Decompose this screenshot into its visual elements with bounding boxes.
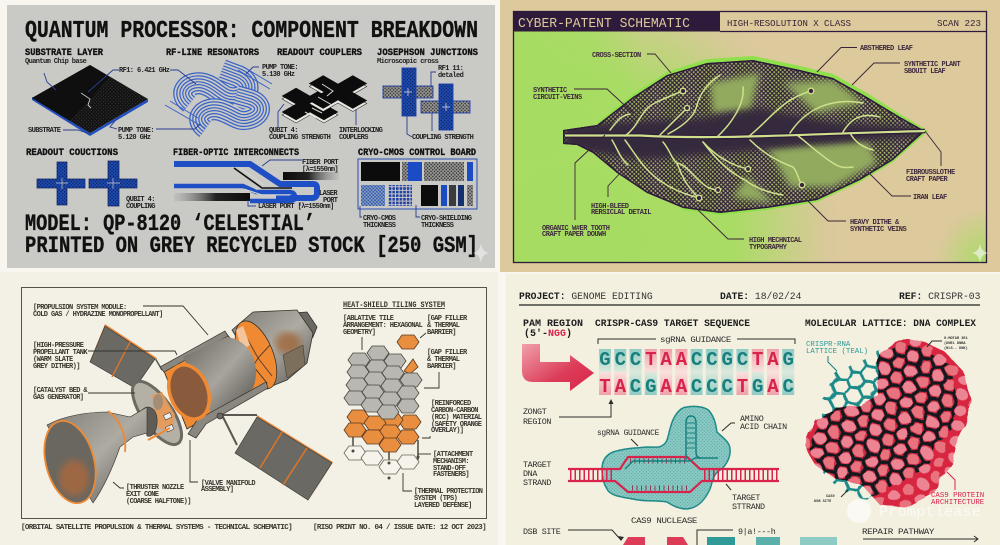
icon: sparkle	[473, 243, 489, 263]
callout: propellant tank: PROPELLANT TANK	[33, 349, 88, 357]
callout: propellant tank: GREY DITHER)]	[33, 363, 80, 371]
section: readout couplers: QUBIT 4:	[269, 127, 298, 135]
label: motar note: G:MOTAR 3E1	[944, 337, 968, 341]
section: substrate layer: 5.120 GHz	[118, 134, 151, 142]
callout: high-bleed detail: RERSICLAL DETAIL	[591, 209, 651, 217]
section: RF-line resonators: RF-LINE RESONATORS	[166, 47, 259, 59]
callout: gap filler one: BARRIER]	[427, 329, 456, 337]
section: readout couctions: COUPLING	[126, 203, 155, 211]
section: cryo-cmos control board: CRYO-CMOS	[363, 215, 396, 223]
callout: attachment mechanism: FASTENERS]	[433, 471, 469, 479]
panel: CRISPR genome editing	[506, 274, 1000, 545]
section: heat-shield tiling system: HEAT-SHIELD TILING SYSTEM	[343, 301, 445, 310]
label: sgRNA guidance: sgRNA GUIDANCE	[597, 428, 659, 438]
callout: fibrous cloth: CRAFT PAPER	[906, 176, 949, 184]
callout: propulsion module: COLD GAS / HYDRAZINE MONOPROPELLANT]	[33, 311, 163, 319]
section: RF-line resonators: PUMP TONE:	[262, 64, 298, 72]
section: cryo-cmos control board: CRYO-CMOS CONTROL BOARD	[358, 147, 476, 159]
callout: attachment mechanism: MECHANISM:	[433, 458, 469, 466]
section: josephson junctions: detaled	[438, 72, 464, 80]
callout: high mechanical typography	[695, 207, 802, 252]
callout: synthetic circuit-veins: SYNTHETIC	[533, 87, 567, 95]
thruster nozzle	[36, 407, 157, 509]
callout: fibrous cloth	[906, 131, 955, 184]
label: target DNA strand: DNA	[523, 469, 538, 479]
footer: print info: [RISO PRINT NO. 04 / ISSUE DATE: 12 OCT 2023]	[313, 524, 486, 532]
label: target DNA strand: TARGET	[523, 460, 551, 470]
sequence grid	[599, 349, 794, 398]
section: PAM region: (5'-NGG)	[524, 329, 572, 340]
watermark: Promptlease	[879, 504, 981, 521]
valve and ring	[123, 374, 191, 452]
label: target strand: TARGET	[732, 493, 760, 503]
callout: attachment mechanism	[418, 451, 473, 479]
callout: ablative tile: ARRANGEMENT: HEXAGONAL	[343, 322, 423, 330]
section: readout couplers: INTERLOCKING	[339, 127, 383, 135]
header bar: CYBER-PATENT SCHEMATIC	[518, 17, 690, 32]
watermark	[847, 499, 981, 523]
callout: gap filler two: [GAP FILLER	[427, 349, 468, 357]
section: fiber-optic interconnects: FIBER-OPTIC INTERCONNECTS	[173, 147, 299, 159]
sequence grid: T	[645, 349, 657, 371]
section: heat-shield tiling system	[343, 301, 445, 480]
callout: reinforced carbon: [REINFORCED	[431, 400, 471, 408]
label: dsb site small: DSB SITE	[814, 500, 832, 504]
section: fiber-optic interconnects: FIBER PORT	[302, 159, 338, 167]
sequence grid: C	[615, 349, 626, 371]
section: substrate layer: RF1: 6.421 GHz	[119, 67, 170, 75]
sgRNA hairpin	[625, 416, 718, 469]
title: quantum processor: QUANTUM PROCESSOR: COMPONENT BREAKDOWN	[25, 18, 478, 45]
callout: reinforced carbon	[422, 400, 482, 438]
panel: quantum processor	[7, 5, 495, 268]
section: substrate layer: SUBSTRATE LAYER	[25, 47, 104, 59]
callout: catalyst bed: GAS GENERATOR]	[33, 394, 83, 402]
sequence grid: C	[630, 376, 641, 398]
callout: cross-section: CROSS-SECTION	[592, 52, 641, 60]
callout: thermal protection: LAYERED DEFENSE]	[414, 502, 472, 510]
callout: iran leaf: IRAN LEAF	[913, 194, 947, 202]
callout: thermal protection: [THERMAL PROTECTION	[414, 488, 483, 496]
callout: gap filler one: & THERMAL	[427, 322, 460, 330]
callout: reinforced carbon: CARBON-CARBON	[431, 407, 478, 415]
section: fiber-optic interconnects: LASER	[319, 190, 338, 198]
label: target strand: STTRAND	[732, 502, 765, 512]
panel: orbital satellite	[0, 272, 498, 545]
label: target DNA strand: STRAND	[523, 478, 551, 488]
section: josephson junctions: JOSEPHSON JUNCTIONS	[377, 47, 478, 59]
callout: high-bleed detail	[591, 168, 651, 217]
callout: high-bleed detail: HIGH-BLEED	[591, 203, 629, 211]
sequence grid: C	[782, 376, 794, 398]
sequence grid: A	[767, 376, 779, 398]
callout: heavy dither	[807, 200, 907, 234]
callout: synthetic circuit-veins	[533, 87, 633, 113]
callout: propulsion module	[33, 304, 208, 335]
sequence grid: A	[660, 349, 672, 371]
callout: gap filler two: & THERMAL	[427, 356, 460, 364]
sgRNA bracket: sgRNA GUIDANCE	[660, 335, 731, 345]
section: josephson junctions	[377, 47, 478, 142]
label: sgRNA guidance	[597, 428, 659, 446]
callout: gap filler one: [GAP FILLER	[427, 315, 468, 323]
label: cas9 protein	[931, 472, 985, 507]
callout: high mechanical typography: HIGH MECHNICAL	[749, 237, 802, 245]
section: substrate layer: PUMP TONE:	[118, 127, 154, 135]
sequence grid: C	[691, 376, 702, 398]
callout: propellant tank	[33, 342, 177, 371]
heading: molecular lattice: MOLECULAR LATTICE: DNA COMPLEX	[805, 319, 976, 330]
callout: gap filler two	[424, 349, 468, 388]
sequence grid: G	[721, 349, 733, 371]
callout: cross-section	[592, 52, 671, 73]
sequence grid: A	[615, 376, 627, 398]
section: readout couplers: COUPLING STRENGTH	[269, 134, 331, 142]
callout: organic tooth: CRAFT PAPER DOUWH	[542, 231, 606, 239]
callout: propellant tank: [HIGH-PRESSURE	[33, 342, 84, 350]
label: motar note	[927, 337, 968, 351]
label: motar note: (HLS.- DNK)	[944, 346, 968, 351]
section: fiber-optic interconnects: PORT	[323, 197, 338, 205]
illustration: satellite	[36, 310, 333, 509]
callout: fibrous cloth: FIBROUSSLOTHE	[906, 169, 955, 177]
section: repair pathway: REPAIR PATHWAY	[862, 527, 934, 537]
callout: thruster nozzle: EXIT CONE	[126, 491, 159, 499]
grey hexagon tiles	[344, 346, 422, 419]
target DNA strand	[568, 457, 779, 492]
label: dsb site small	[814, 490, 848, 504]
section: readout couplers: READOUT COUPLERS	[277, 47, 362, 59]
sequence grid: A	[767, 349, 779, 371]
illustration: molecular lattice	[805, 339, 972, 508]
callout: ablative tile	[343, 315, 423, 350]
callout: synthetic plant: SYNTHETIC PLANT	[904, 61, 961, 69]
section: substrate layer: SUBSTRATE	[28, 127, 61, 135]
section: fiber-optic interconnects: LASER PORT [λ=1550nm]	[258, 203, 334, 211]
sequence grid: G	[782, 349, 794, 371]
section: fiber-optic interconnects	[173, 147, 339, 211]
section: RF-line resonators	[156, 47, 298, 129]
section: readout couctions: QUBIT 4:	[126, 196, 155, 204]
header bar: SCAN 223	[937, 18, 981, 29]
section: fiber-optic interconnects: [λ=1550nm]	[302, 166, 338, 174]
sequence grid: T	[752, 349, 763, 371]
callout: synthetic plant: SBOUIT LEAF	[904, 68, 946, 76]
diagram: cas9 nuclease	[568, 406, 779, 509]
callout: iran leaf	[868, 172, 947, 202]
print stock heading: PRINTED ON GREY RECYCLED STOCK [250 GSM]	[25, 233, 478, 259]
illustration: leaf	[560, 55, 930, 220]
label: amino acid chain	[722, 414, 787, 432]
main body cylinder	[160, 331, 268, 438]
section: repair pathway	[862, 527, 978, 542]
model heading: MODEL: QP-8120 ‘CELESTIAL’	[25, 211, 315, 237]
section: cryo-cmos control board: CRYO-SHIELDING	[421, 215, 472, 223]
heading: target sequence: CRISPR-CAS9 TARGET SEQUENCE	[595, 319, 750, 330]
label: crispr-rna lattice: CRISPR-RNA	[806, 341, 851, 349]
sequence grid: A	[676, 376, 688, 398]
label: target strand	[726, 484, 765, 512]
section: readout couplers: COUPLERS	[339, 134, 368, 142]
orange hexagon tiles	[344, 335, 421, 452]
header bar: HIGH-RESOLUTION X CLASS	[727, 18, 851, 29]
label: crispr-rna lattice: LATTICE (TEAL)	[806, 348, 868, 356]
sequence grid: C	[706, 376, 718, 398]
section: PAM region: PAM REGION	[523, 319, 583, 330]
callout: valve manifold: [VALVE MANIFOLD	[201, 480, 255, 488]
sgRNA bracket	[598, 335, 795, 345]
section: readout couplers	[268, 47, 383, 142]
callout: organic tooth	[542, 135, 610, 239]
callout: catalyst bed	[33, 387, 135, 402]
sequence grid: G	[645, 376, 657, 398]
section: readout couctions: READOUT COUCTIONS	[26, 147, 118, 159]
callout: thermal protection	[403, 473, 483, 510]
label: amino acid chain: ACID CHAIN	[740, 422, 787, 432]
white base tiles with fasteners	[344, 432, 420, 480]
section: PAM region	[522, 319, 594, 391]
sequence grid: G	[752, 376, 763, 398]
section: DSB site: DSB SITE	[523, 527, 561, 537]
callout: catalyst bed: [CATALYST BED &	[33, 387, 88, 395]
sequence grid: A	[676, 349, 688, 371]
sequence grid: C	[721, 376, 733, 398]
callout: zongt region: ZONGT	[523, 407, 547, 417]
callout: synthetic circuit-veins: CIRCUIT-VEINS	[533, 94, 582, 102]
callout: propellant tank: (WARM SLATE	[33, 356, 73, 364]
section: josephson junctions: COUPLING STRENGTH	[412, 134, 474, 142]
label: cas9 protein: ARCHITECTURE	[931, 499, 985, 507]
callout: reinforced carbon: (SAFETY ORANGE	[431, 421, 482, 429]
callout: high mechanical typography: TYPOGRAPHY	[749, 244, 788, 252]
section: josephson junctions: Microscopic cross	[377, 58, 439, 66]
sequence grid: G	[599, 349, 611, 371]
section: substrate layer: Quantum Chip base	[25, 58, 87, 66]
rear module	[227, 310, 317, 395]
section: RF-line resonators: 5.130 GHz	[262, 71, 295, 79]
header bar	[514, 12, 986, 32]
section: DSB site: 9|a!---h	[738, 527, 776, 537]
icon: sparkle	[972, 243, 988, 263]
callout: thermal protection: SYSTEM (TPS)	[414, 495, 458, 503]
callout: synthetic plant	[852, 61, 961, 85]
section: DSB site	[523, 527, 837, 545]
section: cryo-cmos control board: THICKNESS	[363, 222, 396, 230]
header row: REF: CRISPR-03	[899, 291, 981, 302]
label: motar note: (DNEL DNBA	[944, 341, 966, 346]
callout: heavy dither: SYNTHETIC VEINS	[850, 226, 907, 234]
leaf veins	[610, 75, 880, 201]
label: amino acid chain: AMINO	[740, 414, 764, 424]
panel: cyber-patent schematic	[500, 0, 1000, 272]
section: readout couctions	[26, 147, 155, 211]
callout: attachment mechanism: STAND-OFF	[433, 465, 466, 473]
callout: thruster nozzle	[113, 482, 191, 506]
callout: propulsion module: [PROPULSION SYSTEM MODULE:	[33, 304, 127, 312]
callout: absthered leaf	[817, 45, 913, 72]
callout: gap filler one	[420, 315, 468, 338]
label: dsb site small: CAS9	[826, 495, 835, 499]
sequence grid: C	[706, 349, 718, 371]
section: josephson junctions: RF1 11:	[438, 65, 463, 73]
solar panel: lower	[222, 415, 333, 501]
callout: absthered leaf: ABSTHERED LEAF	[860, 45, 913, 53]
label: cas9 protein: CAS9 PROTEIN	[931, 492, 984, 500]
callout: reinforced carbon: (RCC) MATERIAL	[431, 414, 482, 422]
callout: valve manifold: ASSEMBLY]	[201, 486, 233, 494]
callout: attachment mechanism: [ATTACHMENT	[433, 451, 473, 459]
callout: gap filler two: BARRIER]	[427, 363, 456, 371]
callout: zongt region	[523, 399, 614, 427]
sequence grid: A	[660, 376, 672, 398]
callout: thruster nozzle: (COARSE HALFTONE)]	[126, 498, 191, 506]
sequence grid: C	[630, 349, 641, 371]
header row: DATE: 18/02/24	[720, 291, 802, 302]
callout: reinforced carbon: OVERLAY)]	[431, 427, 463, 435]
footer: schematic caption: [ORBITAL SATELLITE PROPULSION & THERMAL SYSTEMS - TECHNICAL SCHEMATIC]	[21, 524, 292, 532]
header row	[519, 291, 981, 305]
callout: heavy dither: HEAVY DITHE &	[850, 219, 900, 227]
header row: PROJECT: GENOME EDITING	[519, 291, 653, 302]
callout: zongt region: REGION	[523, 417, 551, 427]
callout: valve manifold	[190, 440, 255, 494]
callout: thruster nozzle: [THRUSTER NOZZLE	[126, 484, 184, 492]
section: cryo-cmos control board: THICKNESS	[421, 222, 454, 230]
callout: ablative tile: [ABLATIVE TILE	[343, 315, 394, 323]
section: substrate layer	[25, 47, 170, 142]
sequence grid: T	[737, 376, 748, 398]
label: cas9 nuclease: CAS9 NUCLEASE	[631, 516, 697, 526]
solar panel: upper	[90, 324, 162, 394]
sequence grid: C	[737, 349, 748, 371]
callout: ablative tile: GEOMETRY]	[343, 329, 375, 337]
callout: organic tooth: ORGANIC W#ER TOOTH	[542, 225, 610, 233]
label: crispr-rna lattice	[806, 341, 868, 371]
sequence grid: T	[599, 376, 611, 398]
sequence grid: C	[691, 349, 702, 371]
section: cryo-cmos control board	[358, 147, 477, 230]
